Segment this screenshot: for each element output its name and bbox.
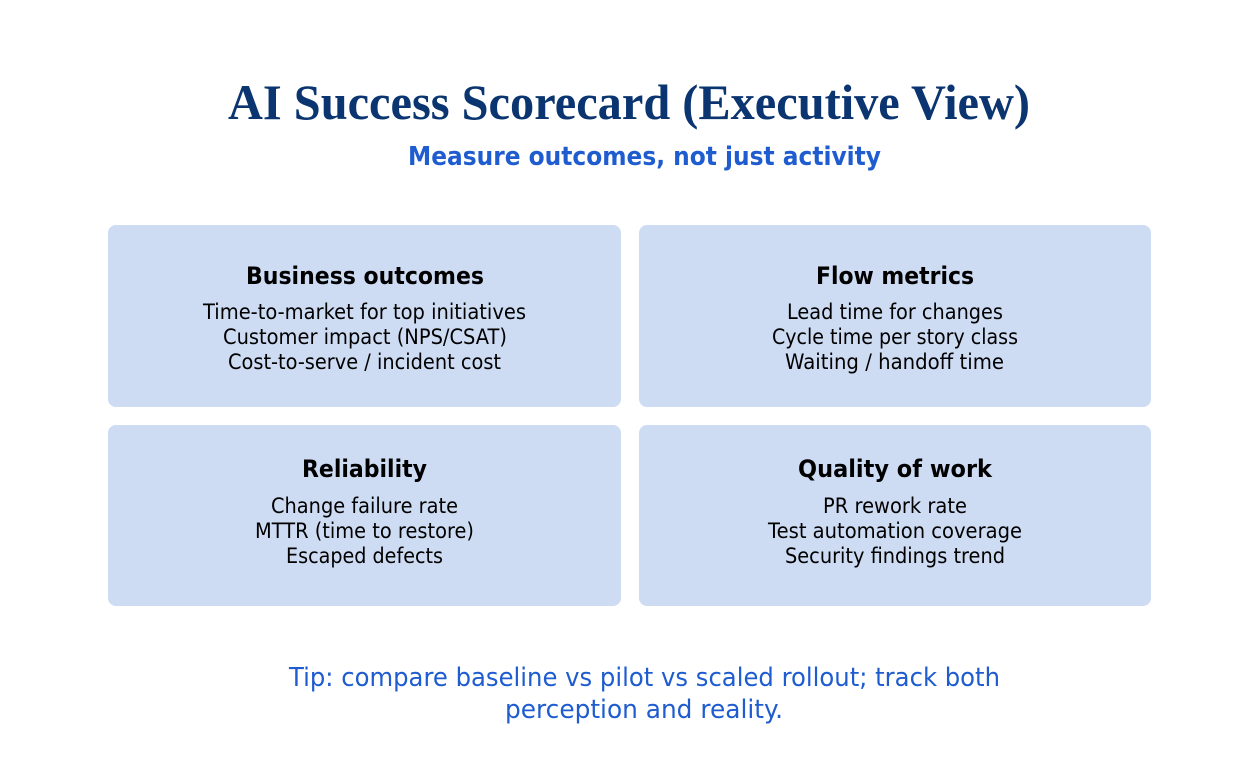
metric list [767,494,1022,569]
metric list: Test automation coverage [767,519,1022,544]
metric list: Lead time for changes [787,300,1003,325]
metric list [255,494,474,569]
panel heading: Business outcomes [246,262,484,290]
title: AI Success Scorecard (Executive View) [228,74,1030,130]
metric list: Escaped defects [286,544,443,569]
panel: reliability [108,425,621,606]
panel: business outcomes [108,225,621,407]
panel background [108,425,621,606]
metric list: Customer impact (NPS/CSAT) [223,325,507,350]
tip text: perception and reality. [505,695,783,725]
metric list: Cost-to-serve / incident cost [228,350,501,375]
metric list: Cycle time per story class [772,325,1018,350]
metric list: Security findings trend [785,544,1005,569]
metric list: MTTR (time to restore) [255,519,474,544]
metric list [202,300,526,375]
metric list: PR rework rate [823,494,967,519]
tip text [288,663,1000,725]
panel background [639,225,1151,407]
metric list: Change failure rate [271,494,458,519]
tip text: Tip: compare baseline vs pilot vs scaled rollout; track both [288,663,1000,693]
panel heading: Reliability [302,455,427,483]
metric list: Time-to-market for top initiatives [202,300,526,325]
panel background [639,425,1151,606]
metric list [772,300,1018,375]
panel: flow metrics [639,225,1151,407]
panel heading: Flow metrics [816,262,974,290]
subtitle: Measure outcomes, not just activity [408,142,881,172]
panel heading: Quality of work [798,455,993,483]
panel background [108,225,621,407]
metric list: Waiting / handoff time [785,350,1004,375]
panel: quality of work [639,425,1151,606]
